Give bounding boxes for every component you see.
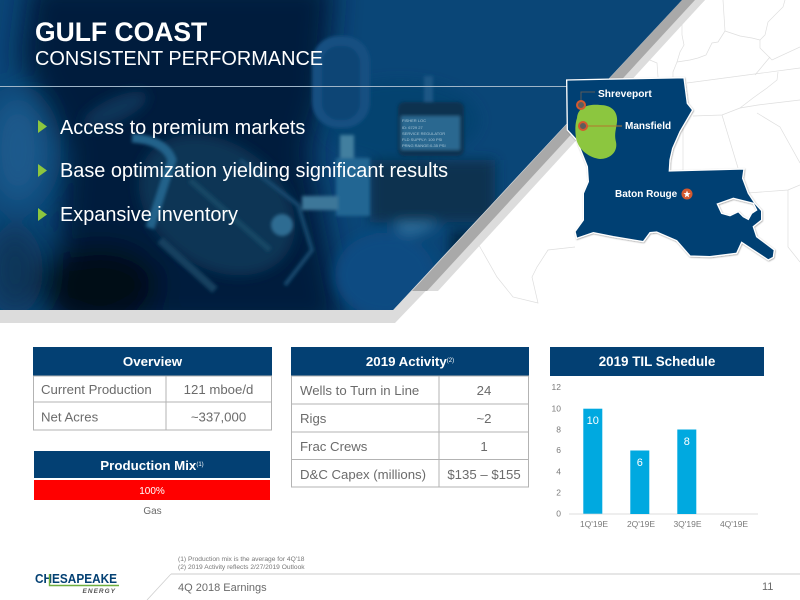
Baton Rouge marker: Baton Rouge — [615, 189, 678, 200]
activity rows: ~2 — [476, 411, 492, 426]
regulator plate text: ID: 6729 27 — [402, 125, 423, 130]
x axis labels: 3Q'19E — [673, 519, 702, 529]
y axis labels: 2 — [556, 488, 561, 498]
activity rows: Wells to Turn in Line — [300, 383, 419, 398]
regulator plate text — [402, 118, 446, 148]
overview rows: ~337,000 — [191, 410, 246, 424]
panel: 2019 TIL schedule chart — [550, 347, 764, 529]
activity rows: D&C Capex (millions) — [300, 467, 426, 482]
overview rows: Current Production — [41, 382, 152, 397]
bullet list — [38, 117, 448, 226]
logo: Chesapeake Energy — [35, 571, 119, 595]
axis baseline — [569, 513, 758, 515]
y axis labels — [552, 382, 561, 518]
y axis labels: 0 — [556, 508, 561, 518]
Mansfield marker — [579, 121, 671, 132]
bullet 2: Base optimization yielding significant results — [60, 160, 448, 182]
panel: 2019 activity table: (2) — [447, 358, 454, 364]
regulator plate text: SERVICE REGULATOR — [402, 131, 445, 136]
footnotes — [178, 556, 305, 571]
regulator plate text: PRNG RANGE:0-35 PSI — [402, 143, 446, 148]
bar values: 8 — [684, 436, 690, 448]
hero photo panel — [0, 0, 700, 330]
footer rule — [147, 574, 800, 600]
panel: 2019 activity table: 2019 Activity — [366, 354, 447, 369]
Mansfield marker: Mansfield — [625, 121, 671, 132]
Shreveport marker: Shreveport — [598, 89, 652, 100]
panel: 2019 TIL schedule chart: 2019 TIL Schedule — [599, 354, 715, 369]
Shreveport marker — [577, 89, 652, 109]
overview header — [33, 347, 272, 376]
state shape — [567, 78, 774, 260]
logo: Chesapeake Energy: ENERGY — [83, 588, 116, 595]
footnotes: (1) Production mix is the average for 4Q'18 — [178, 556, 305, 563]
regulator plate text: FISHER LOC — [402, 118, 426, 123]
map: Louisiana — [567, 78, 774, 260]
panel: 2019 activity table — [291, 347, 529, 487]
overview rows: Net Acres — [41, 410, 99, 424]
y axis labels: 8 — [556, 424, 561, 434]
footer label: 4Q 2018 Earnings — [178, 582, 267, 594]
activity header — [291, 347, 529, 376]
panel: overview table: Overview — [123, 354, 183, 369]
x axis labels — [580, 519, 748, 529]
activity rows — [300, 383, 521, 482]
y axis labels: 4 — [556, 466, 561, 476]
production mix bar — [34, 480, 270, 500]
bar values: 10 — [587, 415, 599, 427]
bars — [583, 409, 696, 514]
y axis labels: 10 — [552, 404, 561, 414]
bar values — [587, 415, 690, 469]
chart header — [550, 347, 764, 376]
panel: overview table — [33, 347, 272, 430]
x axis labels: 2Q'19E — [627, 519, 655, 529]
activity rows: 1 — [480, 439, 488, 454]
decorative hero gray band — [0, 0, 705, 323]
title: GULF COAST — [35, 17, 207, 47]
subtitle: CONSISTENT PERFORMANCE — [35, 48, 323, 70]
bullet 1: Access to premium markets — [60, 117, 305, 139]
panel: production mix: Production Mix — [100, 458, 196, 473]
regulator plate text: FLD SUPPLY: 100 PSI — [402, 137, 442, 142]
production mix header — [34, 451, 270, 478]
footnotes: (2) 2019 Activity reflects 2/27/2019 Outlook — [178, 564, 305, 571]
y axis labels: 6 — [556, 445, 561, 455]
panel: production mix: (1) — [196, 462, 204, 468]
panel: production mix: 100% — [139, 486, 165, 497]
activity rows: Rigs — [300, 411, 327, 426]
logo: Chesapeake Energy: CHESAPEAKE — [35, 571, 117, 586]
page number: 11 — [762, 581, 773, 593]
panel: production mix — [34, 451, 270, 517]
bar label: Gas — [143, 506, 162, 517]
x axis labels: 1Q'19E — [580, 519, 608, 529]
y axis labels: 12 — [552, 382, 561, 392]
x axis labels: 4Q'19E — [720, 519, 748, 529]
activity rows: 24 — [477, 383, 491, 398]
activity rows: Frac Crews — [300, 439, 368, 454]
overview rows — [41, 382, 253, 424]
background state outlines map — [470, 0, 800, 303]
activity rows: $135 – $155 — [447, 467, 521, 482]
bullet 3: Expansive inventory — [60, 204, 238, 226]
bar values: 6 — [637, 457, 643, 469]
Haynesville play area — [575, 105, 617, 159]
header divider line — [0, 86, 600, 87]
overview rows: 121 mboe/d — [184, 382, 253, 397]
